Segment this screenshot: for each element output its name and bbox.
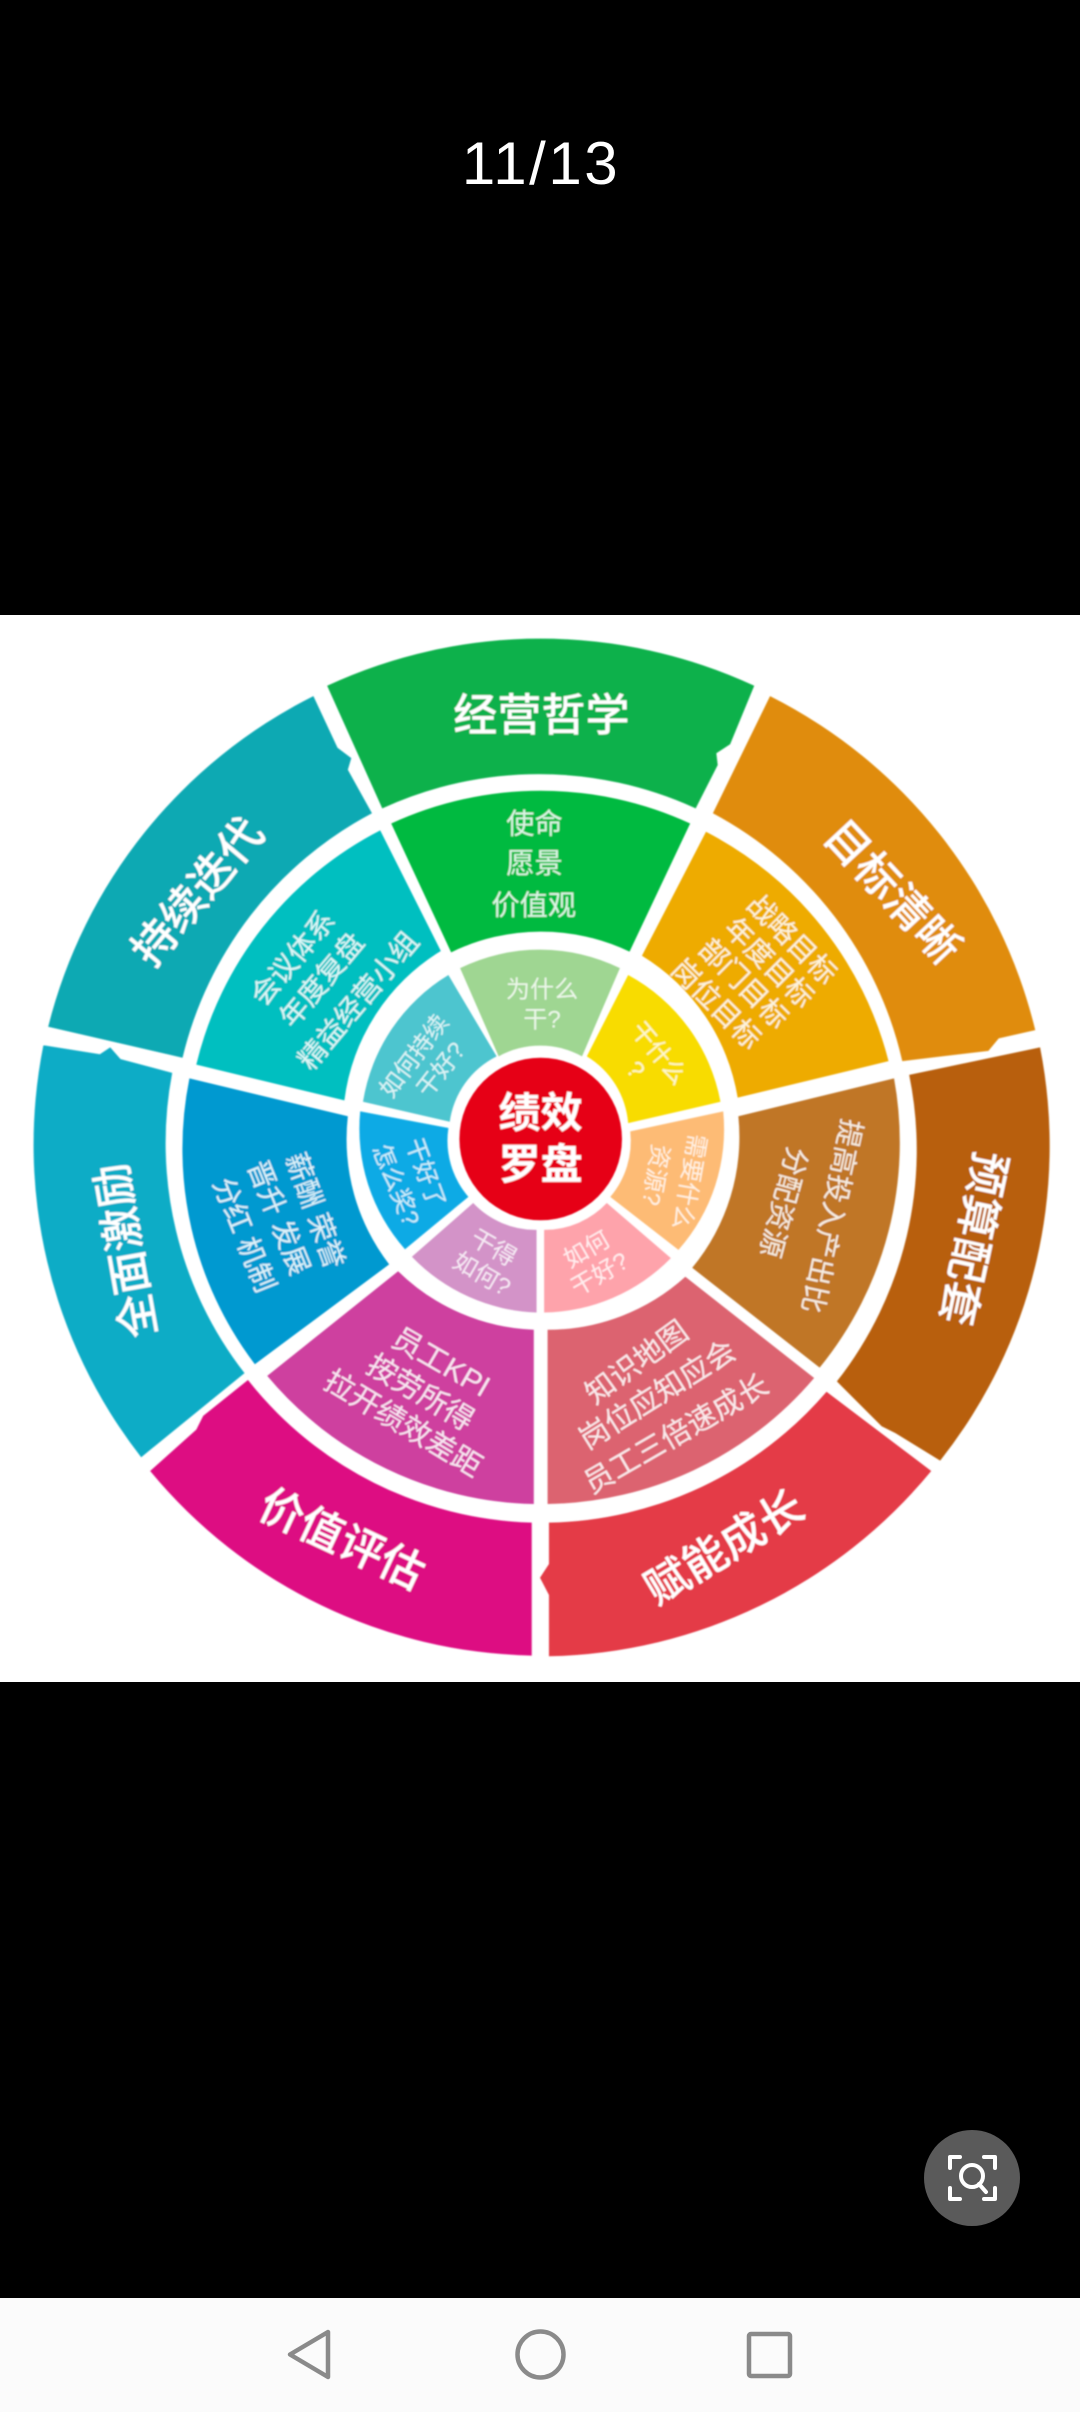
icon: back	[290, 2332, 328, 2377]
text: 需要什么资源?: 资源?	[636, 1142, 674, 1207]
icon: home	[518, 2332, 564, 2378]
text: iteration list: 会议体系	[244, 904, 341, 1011]
segment: 持续迭代	[48, 696, 372, 1058]
label: 预算配套: 预算配套	[930, 1147, 1015, 1329]
segment: goals	[642, 832, 889, 1098]
segment: budget	[692, 1078, 900, 1368]
segment: how well	[544, 1203, 671, 1313]
icon: recents	[749, 2334, 790, 2376]
label: 赋能成长: 赋能成长	[636, 1482, 813, 1615]
segment: resources	[610, 1111, 724, 1250]
segment: evaluation	[267, 1271, 534, 1504]
text: budget list: 分配资源	[754, 1144, 814, 1261]
text: 干好了怎么奖?: 干好了	[400, 1135, 450, 1212]
segment: 预算配套	[837, 1047, 1050, 1461]
text: 如何干好?: 如何	[559, 1226, 614, 1274]
segment: iteration	[196, 830, 441, 1100]
text: iteration list: 年度复盘	[273, 926, 370, 1033]
navigation bar	[0, 2298, 1080, 2412]
text: 使命 愿景 价值观	[491, 808, 576, 921]
text: incentive list: 分红 机制	[207, 1173, 282, 1297]
segment: 经营哲学	[327, 639, 754, 808]
text: incentive list: 晋升 发展	[242, 1156, 316, 1279]
text: 如何干好?: 干好?	[567, 1248, 633, 1302]
text: goal list	[665, 888, 843, 1055]
text: evaluation list: 员工KPI	[386, 1322, 495, 1404]
segment: sustain	[363, 975, 497, 1122]
segment: 目标清晰	[713, 696, 1035, 1061]
panel: middle ring	[182, 791, 900, 1504]
label: 全面激励: 全面激励	[87, 1159, 166, 1342]
page counter: 11/13	[462, 130, 620, 197]
text: 干好了怎么奖?: 怎么奖?	[367, 1140, 424, 1230]
compass wheel	[34, 639, 1050, 1656]
floating lens button	[924, 2130, 1020, 2226]
text: goal list: 年度目标	[718, 911, 821, 1014]
text: 为什么干?	[506, 977, 578, 1033]
text: 需要什么资源?: 需要什么	[667, 1132, 710, 1231]
text: budget list: 提高投入产出比	[796, 1116, 868, 1316]
text: 需要什么资源?	[636, 1132, 710, 1231]
segment: incentive	[182, 1078, 389, 1364]
text: 使命 愿景 价值观: 价值观	[491, 889, 576, 921]
text: incentive list	[207, 1148, 351, 1297]
text: 干得如何?: 干得	[466, 1225, 521, 1272]
text: goal list: 战略目标	[741, 888, 843, 990]
label: 经营哲学: 经营哲学	[453, 692, 630, 741]
segment: what	[587, 975, 720, 1123]
hub text	[499, 1089, 583, 1188]
text: iteration list	[244, 904, 425, 1076]
text: 干什么?: ?	[620, 1056, 650, 1084]
text: 使命 愿景 价值观: 使命	[506, 808, 563, 840]
text: 如何持续干好?: 干好?	[412, 1038, 471, 1103]
segment: 全面激励	[34, 1045, 245, 1457]
image panel: white background	[0, 615, 1080, 1682]
text: iteration list: 精益经营小组	[291, 925, 425, 1076]
text: growth list: 知识地图	[580, 1315, 695, 1411]
text: 使命 愿景 价值观: 愿景	[506, 847, 563, 879]
text: growth list: 岗位应知应会	[574, 1334, 742, 1456]
text: 如何持续干好?: 如何持续	[375, 1010, 454, 1103]
text: incentive list: 薪酬 荣誉	[280, 1148, 351, 1273]
center hub	[459, 1058, 622, 1220]
segment: how done	[412, 1203, 537, 1313]
hub text: 罗盘	[499, 1141, 583, 1188]
text: 干什么?: 干什么	[625, 1017, 692, 1090]
text: evaluation list: 按劳所得	[361, 1348, 479, 1438]
text: 干得如何?: 如何?	[448, 1248, 515, 1302]
icon: scan magnifier	[950, 2157, 995, 2199]
segment: 价值评估	[150, 1380, 532, 1656]
segment: 赋能成长	[540, 1392, 931, 1656]
text: 如何干好?	[559, 1226, 633, 1302]
text: 干得如何?	[448, 1225, 521, 1302]
text: goal list: 部门目标	[693, 932, 795, 1035]
text: growth list: 员工三倍速成长	[578, 1368, 774, 1501]
segment: mission	[391, 791, 690, 952]
text: budget list	[754, 1116, 868, 1316]
label: 价值评估: 价值评估	[251, 1480, 432, 1599]
panel: outer ring	[34, 639, 1050, 1656]
label: 持续迭代: 持续迭代	[123, 809, 274, 976]
text: 为什么干?: 干?	[523, 1006, 561, 1033]
text: growth list	[574, 1315, 774, 1501]
text: goal list: 岗位目标	[665, 953, 768, 1055]
segment: reward	[359, 1111, 468, 1249]
segment: why	[460, 950, 620, 1056]
label: 目标清晰: 目标清晰	[814, 811, 970, 974]
text: 为什么干?: 为什么	[506, 977, 578, 1004]
panel: inner ring	[359, 950, 724, 1313]
hub text: 绩效	[499, 1089, 583, 1136]
text: evaluation list: 拉开绩效差距	[318, 1364, 488, 1484]
text: 干好了怎么奖?	[367, 1135, 450, 1230]
segment: growth	[548, 1277, 814, 1504]
